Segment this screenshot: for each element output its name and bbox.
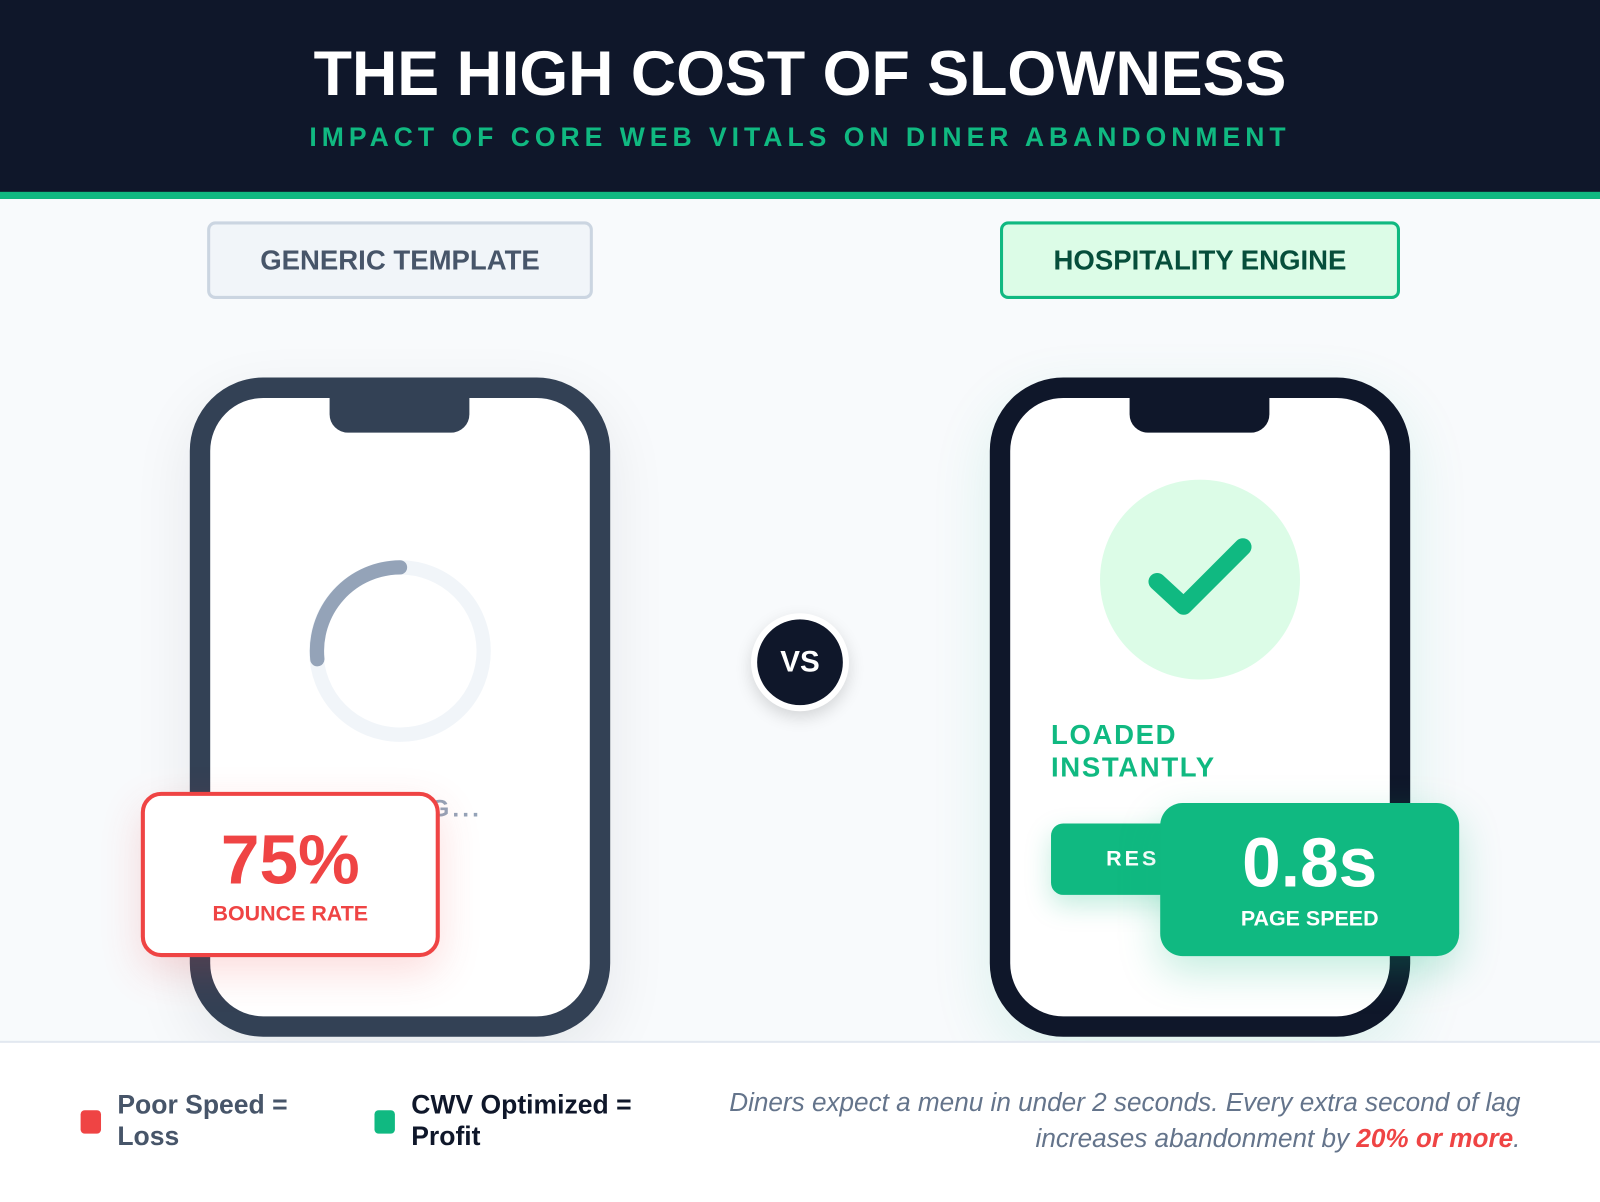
reserve button [1051, 823, 1286, 895]
callout: bounce rate [141, 792, 440, 957]
vs badge [751, 613, 849, 711]
subtitle: IMPACT OF CORE WEB VITALS ON DINER ABANDONMENT [309, 121, 1291, 152]
header [0, 0, 1600, 199]
vs badge: VS [780, 646, 820, 679]
icon: check circle [1100, 480, 1300, 680]
title: THE HIGH COST OF SLOWNESS [314, 39, 1286, 109]
label: hospitality engine: HOSPITALITY ENGINE [1054, 245, 1346, 276]
loaded text: INSTANTLY [1051, 752, 1216, 783]
legend: optimized: CWV Optimized = [411, 1089, 632, 1119]
callout: bounce rate: 75% [221, 821, 360, 899]
note text [729, 1089, 1520, 1153]
callout: page speed: PAGE SPEED [1241, 907, 1379, 931]
label: hospitality engine [1000, 221, 1400, 299]
callout: page speed [1160, 803, 1459, 956]
label: generic template: GENERIC TEMPLATE [260, 245, 540, 276]
notch [330, 398, 469, 433]
legend: optimized [374, 1089, 632, 1151]
callout: bounce rate: BOUNCE RATE [213, 902, 368, 926]
loaded text: LOADED [1051, 719, 1177, 750]
legend: poor speed: Loss [117, 1120, 179, 1151]
note text: Diners expect a menu in under 2 seconds. Every extra second of lag [729, 1089, 1520, 1117]
phone: hospitality [990, 378, 1410, 1037]
footer [0, 1041, 1600, 1202]
loading text: LOADING... [318, 795, 482, 822]
legend: optimized: Profit [411, 1120, 481, 1151]
loaded text [1051, 719, 1216, 783]
notch [1130, 398, 1269, 433]
legend: poor speed: Poor Speed = [117, 1089, 288, 1119]
label: generic template [207, 221, 593, 299]
spinner [309, 560, 491, 742]
legend: poor speed [80, 1089, 288, 1151]
callout: page speed: 0.8s [1242, 824, 1377, 902]
note text: increases abandonment by 20% or more. [1036, 1124, 1520, 1153]
reserve button: RESERVE [1106, 847, 1230, 870]
phone: generic [190, 378, 610, 1037]
